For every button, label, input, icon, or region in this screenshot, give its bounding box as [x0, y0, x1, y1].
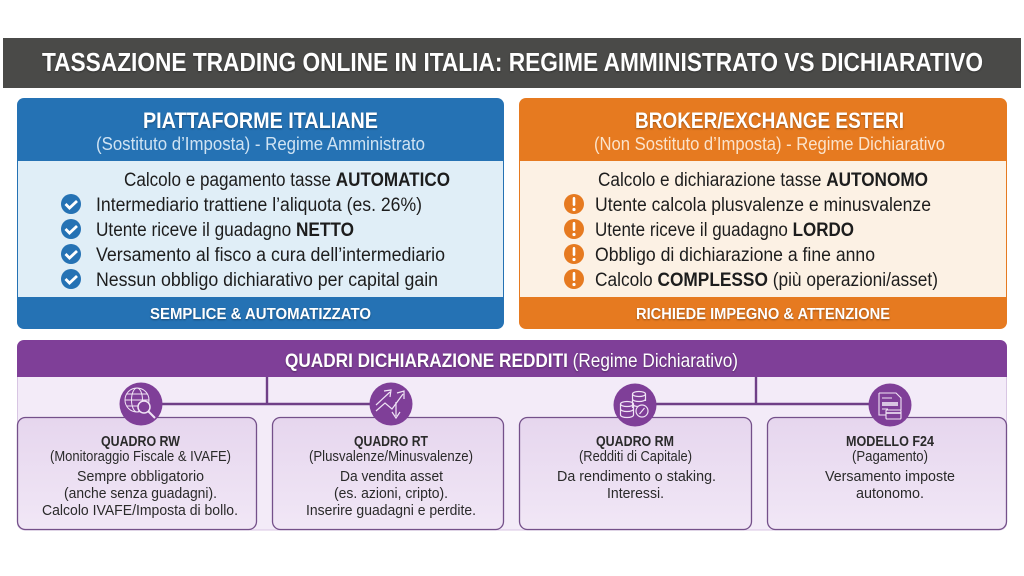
card: quadro RT: (es. azioni, cripto).	[334, 486, 448, 502]
heading: piattaforme italiane: PIATTAFORME ITALIANE	[143, 108, 378, 133]
card: modello F24	[768, 418, 1006, 530]
panel: broker esteri	[519, 98, 1007, 329]
card: quadro RT	[272, 418, 504, 530]
footer: impegno: RICHIEDE IMPEGNO & ATTENZIONE	[636, 306, 890, 323]
subheading: non sostituto: (Non Sostituto d’Imposta) - Regime Dichiarativo	[594, 134, 945, 154]
heading: quadri: QUADRI DICHIARAZIONE REDDITI (Regime Dichiarativo)	[285, 350, 738, 372]
card: quadro RW: (anche senza guadagni).	[64, 486, 217, 502]
card: quadro RM: Da rendimento o staking.	[557, 469, 716, 485]
icon: warning 4	[564, 269, 584, 289]
icon: coins with percent	[614, 384, 656, 426]
card: quadro RW: (Monitoraggio Fiscale & IVAFE)	[50, 449, 231, 465]
lead text: autonomo: Calcolo e dichiarazione tasse AUTONOMO	[598, 170, 928, 191]
card: quadro RW: QUADRO RW	[101, 434, 180, 450]
title bar	[3, 38, 1021, 88]
list item 1: Intermediario trattiene l’aliquota (es. 26%)	[96, 195, 422, 216]
icon: warning 1	[564, 194, 584, 214]
card: quadro RW: Sempre obbligatorio	[77, 469, 204, 485]
connector lines	[141, 377, 890, 404]
card: quadro RM: Interessi.	[607, 486, 664, 502]
list item 3: Versamento al fisco a cura dell’intermediario	[96, 245, 445, 266]
card: quadro RT: Da vendita asset	[340, 469, 443, 485]
card: modello F24: autonomo.	[856, 486, 924, 502]
card: quadro RT: Inserire guadagni e perdite.	[306, 503, 476, 519]
card: quadro RT: QUADRO RT	[354, 434, 428, 450]
card: quadro RW: Calcolo IVAFE/Imposta di bollo.	[42, 503, 238, 519]
list item 2: Utente riceve il guadagno NETTO	[96, 220, 354, 241]
card: quadro RW	[18, 418, 256, 530]
footer: semplice: SEMPLICE & AUTOMATIZZATO	[150, 306, 371, 323]
icon: check 2	[61, 219, 81, 239]
lead text: automatico: Calcolo e pagamento tasse AUTOMATICO	[124, 170, 450, 191]
heading: broker esteri: BROKER/EXCHANGE ESTERI	[635, 108, 904, 133]
subheading: sostituto d'imposta: (Sostituto d’Imposta) - Regime Amministrato	[96, 134, 425, 154]
panel: quadri dichiarazione redditi	[17, 340, 1007, 530]
list item 2: Utente riceve il guadagno LORDO	[595, 220, 854, 241]
card: quadro RM	[520, 418, 752, 530]
icon: warning 2	[564, 219, 584, 239]
list item 4: Calcolo COMPLESSO (più operazioni/asset)	[595, 270, 938, 291]
card: modello F24: (Pagamento)	[852, 449, 928, 465]
icon: warning 3	[564, 244, 584, 264]
icon: trend arrows	[370, 382, 412, 426]
icon: check 4	[61, 269, 81, 289]
list item 1: Utente calcola plusvalenze e minusvalenze	[595, 195, 931, 216]
list item 4: Nessun obbligo dichiarativo per capital gain	[96, 270, 438, 291]
card: modello F24: MODELLO F24	[846, 434, 934, 450]
icon: check 1	[61, 194, 81, 214]
list item 3: Obbligo di dichiarazione a fine anno	[595, 245, 875, 266]
card: modello F24: Versamento imposte	[825, 469, 955, 485]
card: quadro RM: (Redditi di Capitale)	[579, 449, 692, 465]
icon: F24 document	[868, 384, 912, 426]
panel: piattaforme italiane	[17, 98, 504, 329]
card: quadro RM: QUADRO RM	[596, 434, 674, 450]
icon: check 3	[61, 244, 81, 264]
card: quadro RT: (Plusvalenze/Minusvalenze)	[309, 449, 473, 465]
icon: globe with magnifier	[120, 382, 162, 426]
